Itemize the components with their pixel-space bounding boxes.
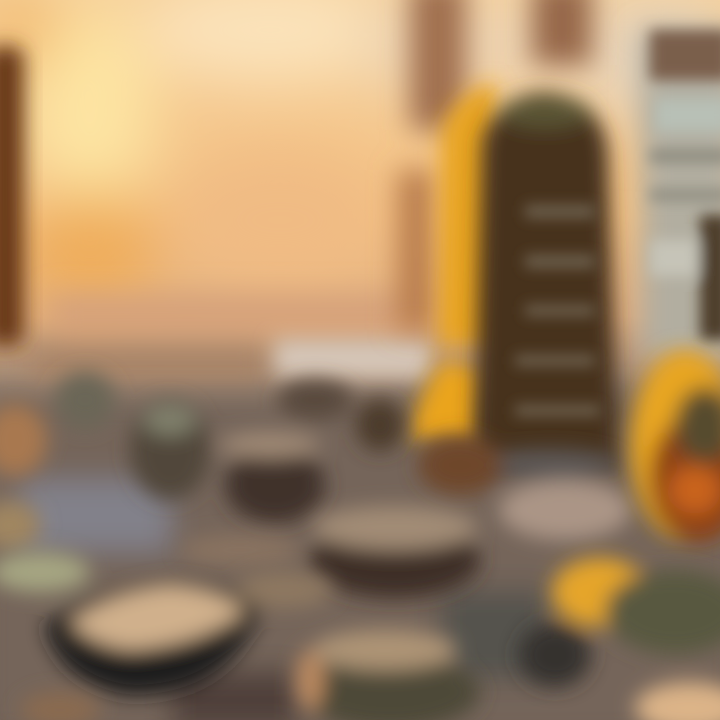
tower window stripes [515,205,600,416]
pale band behind tower [275,340,430,378]
tower base coins [418,435,631,540]
mid stones [0,372,404,549]
foreground flat stone [0,552,333,695]
left tower [0,46,24,346]
sun glow [0,0,720,310]
main tower yellow edge [408,82,505,445]
central coin [180,506,480,598]
right coin stack [630,350,720,542]
top right background towers [398,0,592,330]
distant city haze [30,295,420,385]
foreground bottom coin [20,630,480,720]
ground base [0,395,720,720]
right grey building [640,30,720,360]
main dark tower [474,92,618,470]
lower right coins [519,558,720,720]
